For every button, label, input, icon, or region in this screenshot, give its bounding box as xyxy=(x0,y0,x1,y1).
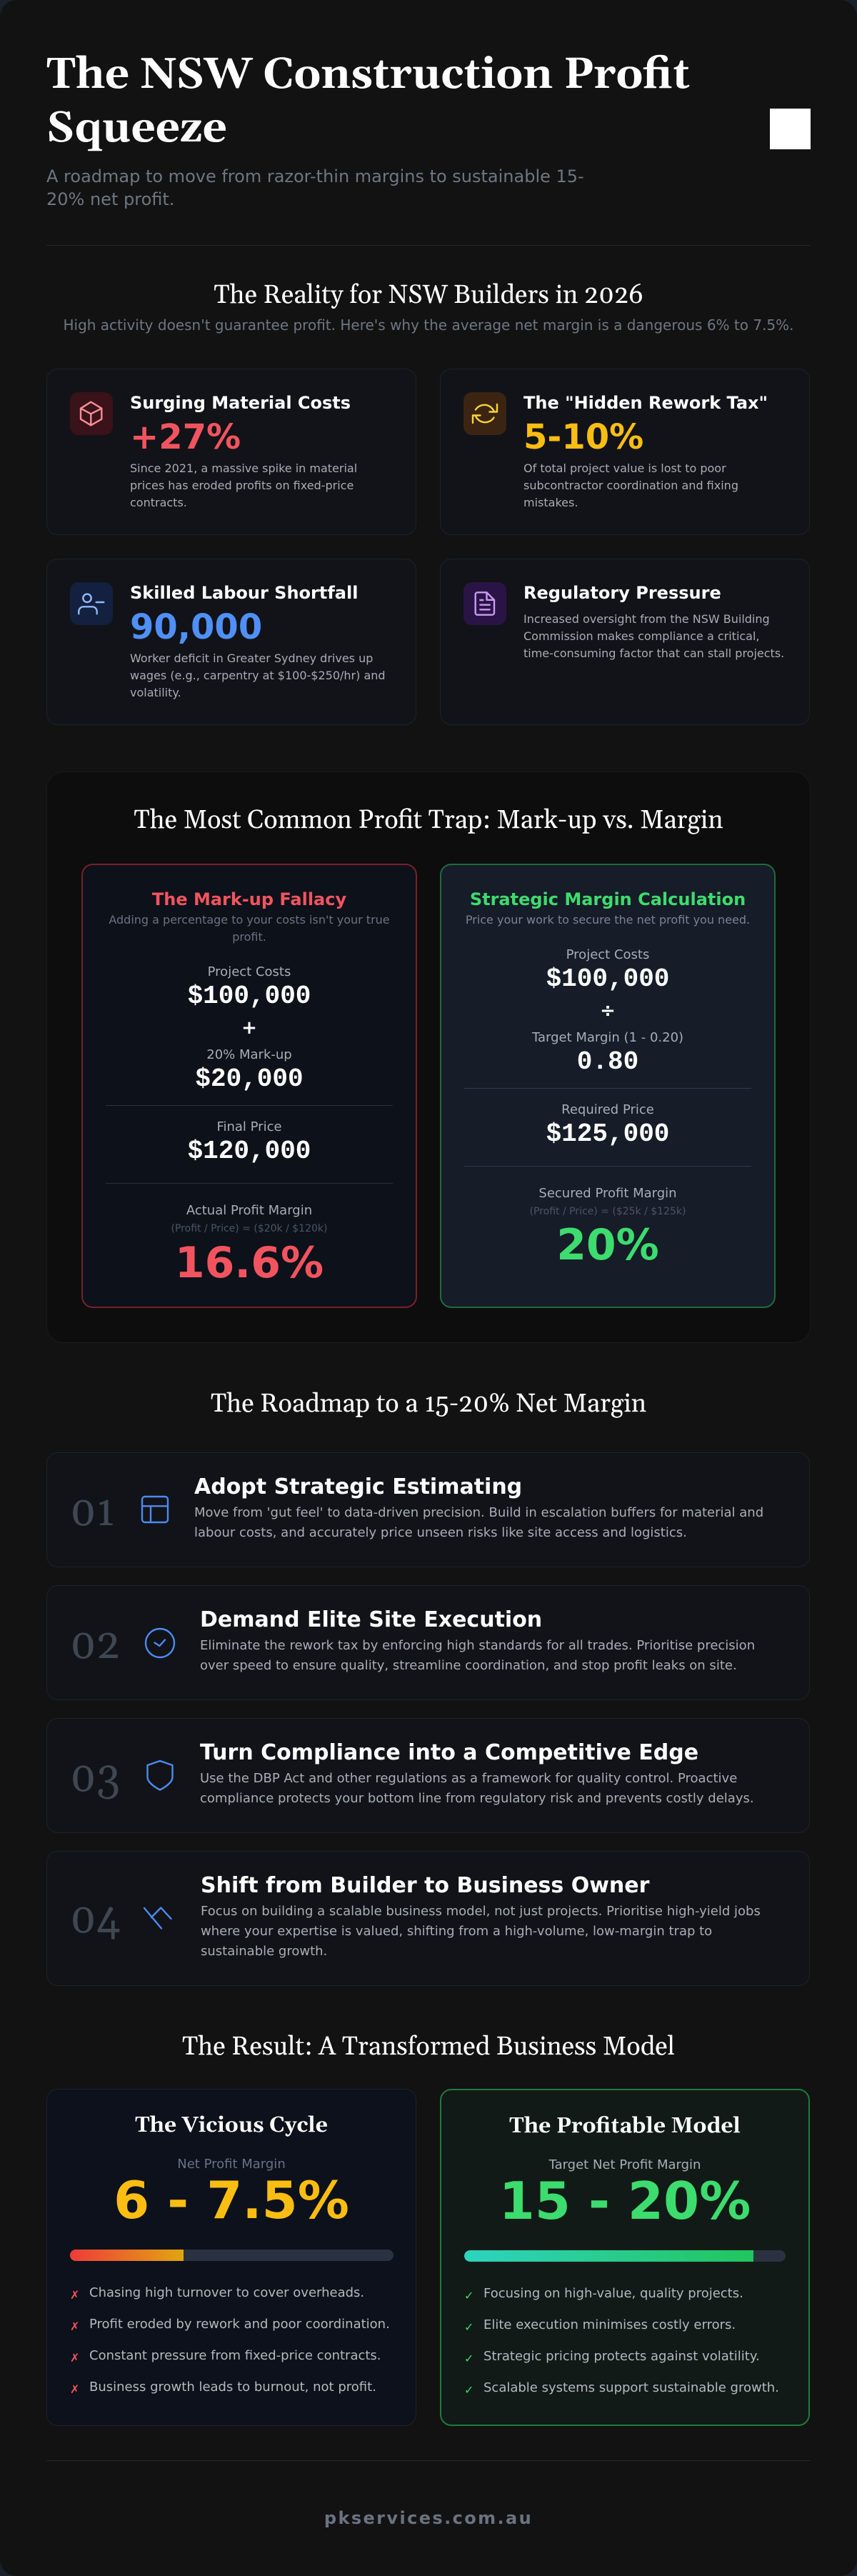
list item: ✗ xyxy=(70,2320,79,2333)
step number: 02 xyxy=(70,1618,120,1673)
panel title: The Vicious Cycle xyxy=(135,2112,328,2140)
result: secured margin: Secured Profit Margin xyxy=(538,1186,677,1201)
heading: roadmap: The Roadmap to a 15-20% Net Margin xyxy=(211,1389,646,1421)
panel: the profitable model xyxy=(440,2089,810,2426)
list item: ✗ xyxy=(70,2288,79,2302)
result: secured margin: (Profit / Price) = ($25k / $125k) xyxy=(530,1206,686,1217)
panel: the vicious cycle xyxy=(46,2089,416,2426)
calculation: target margin: 0.80 xyxy=(577,1047,638,1077)
icon: layout xyxy=(141,1496,169,1523)
calculation: project costs: Project Costs xyxy=(566,947,649,962)
description: contracts. xyxy=(130,496,187,509)
step number: 03 xyxy=(70,1751,120,1806)
title: The NSW Construction Profit xyxy=(46,48,690,103)
card title: Surging Material Costs xyxy=(130,393,351,413)
description: mistakes. xyxy=(523,496,578,509)
step title: Shift from Builder to Business Owner xyxy=(201,1873,649,1898)
heading: the reality: The Reality for NSW Builders in 2026 xyxy=(214,280,643,312)
step description xyxy=(200,1771,754,1806)
section intro: High activity doesn't guarantee profit. Here's why the average net margin is a dangerous 6% to 7.5%. xyxy=(63,316,794,334)
progress bar xyxy=(70,2250,394,2261)
panel description xyxy=(109,913,390,944)
step description: labour costs, and accurately price unseen risks like site access and logistics. xyxy=(194,1525,687,1540)
step description: Move from 'gut feel' to data-driven precision. Build in escalation buffers for material and xyxy=(194,1505,763,1520)
description: Commission makes compliance a critical, xyxy=(523,629,760,643)
description: prices has eroded profits on fixed-price xyxy=(130,479,354,492)
card title: Regulatory Pressure xyxy=(523,583,721,603)
calculation: target margin: Target Margin (1 - 0.20) xyxy=(532,1030,683,1045)
description: subcontractor coordination and fixing xyxy=(523,479,738,492)
description xyxy=(523,461,738,509)
panel: hidden rework tax xyxy=(440,369,810,535)
list item: Strategic pricing protects against volatility. xyxy=(483,2349,760,2364)
list item: Chasing high turnover to cover overheads. xyxy=(89,2285,364,2300)
list item: Elite execution minimises costly errors. xyxy=(483,2317,736,2332)
step title: Turn Compliance into a Competitive Edge xyxy=(200,1740,698,1765)
icon: scale xyxy=(143,1907,172,1929)
margin value: 15 - 20% xyxy=(499,2171,751,2231)
heading: the result: The Result: A Transformed Business Model xyxy=(182,2032,675,2064)
list item: ✗ xyxy=(70,2351,79,2365)
list item: ✓ xyxy=(464,2383,473,2397)
description: wages (e.g., carpentry at $100-$250/hr) and xyxy=(130,669,386,682)
subtitle: A roadmap to move from razor-thin margins to sustainable 15- xyxy=(46,166,584,186)
list item: ✓ xyxy=(464,2320,473,2334)
calculation: final price: $120,000 xyxy=(188,1137,311,1166)
step description xyxy=(201,1904,761,1959)
icon: shield xyxy=(146,1760,174,1791)
result: secured margin: 20% xyxy=(556,1220,659,1270)
panel: mark-up fallacy xyxy=(81,864,417,1308)
calculation: project costs xyxy=(188,964,311,1011)
calculation: required price xyxy=(546,1102,669,1149)
calculation: final price xyxy=(188,1119,311,1166)
list item: ✗ xyxy=(70,2382,79,2396)
progress bar xyxy=(464,2250,786,2262)
step number: 04 xyxy=(70,1892,121,1947)
step 4 xyxy=(46,1851,810,1986)
result: actual margin xyxy=(171,1203,327,1288)
description: volatility. xyxy=(130,686,181,699)
calculation: required price: $125,000 xyxy=(546,1119,669,1149)
title: Squeeze xyxy=(46,101,227,156)
calculation: mark-up xyxy=(195,1047,304,1094)
panel: surging material costs xyxy=(46,369,416,535)
list item: ✓ xyxy=(464,2289,473,2302)
panel title: Strategic Margin Calculation xyxy=(470,889,746,909)
margin label: Target Net Profit Margin xyxy=(549,2157,701,2172)
calculation: mark-up: 20% Mark-up xyxy=(206,1047,292,1062)
panel: strategic margin xyxy=(440,864,776,1308)
description xyxy=(523,612,784,660)
panel: regulatory pressure xyxy=(440,559,810,725)
panel: profit trap xyxy=(46,772,811,1343)
panel description: profit. xyxy=(232,930,266,944)
description xyxy=(130,461,357,509)
step description: sustainable growth. xyxy=(201,1944,327,1959)
margin label: Net Profit Margin xyxy=(177,2157,286,2172)
list: vicious cycle xyxy=(70,2285,390,2396)
card title: The "Hidden Rework Tax" xyxy=(523,393,768,413)
step description: over speed to ensure quality, streamline coordination, and stop profit leaks on site. xyxy=(200,1658,737,1673)
list item: Scalable systems support sustainable growth. xyxy=(483,2380,779,2395)
result: secured margin xyxy=(530,1186,686,1270)
icon: check circle xyxy=(144,1627,176,1659)
calculation: required price: Required Price xyxy=(561,1102,654,1117)
heading: profit trap: The Most Common Profit Trap: Mark-up vs. Margin xyxy=(134,805,723,837)
step description: compliance protects your bottom line from regulatory risk and prevents costly delays. xyxy=(200,1791,754,1806)
description: Worker deficit in Greater Sydney drives up xyxy=(130,652,373,665)
panel title: The Profitable Model xyxy=(509,2113,741,2140)
title xyxy=(46,48,690,156)
step 2 xyxy=(46,1585,810,1700)
list item: Profit eroded by rework and poor coordination. xyxy=(89,2317,390,2332)
operator: plus: + xyxy=(241,1017,257,1039)
panel title: The Mark-up Fallacy xyxy=(152,889,346,909)
calculation: project costs: Project Costs xyxy=(208,964,291,979)
operator: divide: ÷ xyxy=(600,1000,616,1022)
calculation: project costs: $100,000 xyxy=(546,964,669,994)
panel description: Adding a percentage to your costs isn't your true xyxy=(109,913,390,927)
subtitle: 20% net profit. xyxy=(46,189,174,209)
description: Since 2021, a massive spike in material xyxy=(130,461,357,475)
step description: where your expertise is valued, shifting from a high-volume, low-margin trap to xyxy=(201,1924,712,1939)
result: actual margin: 16.6% xyxy=(175,1238,324,1288)
subtitle xyxy=(46,166,584,209)
calculation: target margin xyxy=(531,1030,683,1077)
list item: ✓ xyxy=(464,2352,473,2365)
calculation: project costs: $100,000 xyxy=(188,982,311,1011)
icon: user minus xyxy=(70,582,113,625)
footer website: pkservices.com.au xyxy=(324,2508,533,2528)
panel: skilled labour shortfall xyxy=(46,559,416,725)
progress fill xyxy=(464,2250,753,2262)
statistic: 5-10% xyxy=(523,417,643,457)
result: actual margin: (Profit / Price) = ($20k / $120k) xyxy=(171,1223,327,1234)
icon: box xyxy=(70,392,113,435)
statistic: 90,000 xyxy=(130,607,262,647)
step 3 xyxy=(46,1718,810,1833)
step number: 01 xyxy=(70,1485,115,1540)
step description xyxy=(200,1638,755,1673)
header xyxy=(46,48,811,209)
step 1 xyxy=(46,1452,810,1567)
list item: Business growth leads to burnout, not profit. xyxy=(89,2380,376,2395)
margin value: 6 - 7.5% xyxy=(114,2170,349,2230)
calculation: mark-up: $20,000 xyxy=(195,1064,304,1094)
calculation: project costs xyxy=(546,947,669,994)
step title: Adopt Strategic Estimating xyxy=(194,1474,522,1499)
step title: Demand Elite Site Execution xyxy=(200,1607,542,1632)
icon: document xyxy=(463,582,506,625)
description: Increased oversight from the NSW Building xyxy=(523,612,770,626)
result: actual margin: Actual Profit Margin xyxy=(186,1203,312,1218)
logo placeholder xyxy=(770,109,811,149)
list item: Constant pressure from fixed-price contracts. xyxy=(89,2348,381,2363)
icon: refresh xyxy=(463,392,506,435)
step description: Focus on building a scalable business model, not just projects. Prioritise high-yield jobs xyxy=(201,1904,761,1919)
step description: Use the DBP Act and other regulations as a framework for quality control. Proactive xyxy=(200,1771,737,1786)
panel description: Price your work to secure the net profit you need. xyxy=(466,913,750,927)
list: profitable model xyxy=(464,2286,779,2397)
description xyxy=(130,652,386,699)
calculation: final price: Final Price xyxy=(216,1119,282,1134)
list item: Focusing on high-value, quality projects. xyxy=(483,2286,743,2301)
step description: Eliminate the rework tax by enforcing high standards for all trades. Prioritise precision xyxy=(200,1638,755,1653)
step description xyxy=(194,1505,763,1540)
card title: Skilled Labour Shortfall xyxy=(130,583,358,603)
description: time-consuming factor that can stall projects. xyxy=(523,647,784,660)
statistic: +27% xyxy=(130,417,241,457)
description: Of total project value is lost to poor xyxy=(523,461,726,475)
progress fill xyxy=(70,2250,184,2261)
